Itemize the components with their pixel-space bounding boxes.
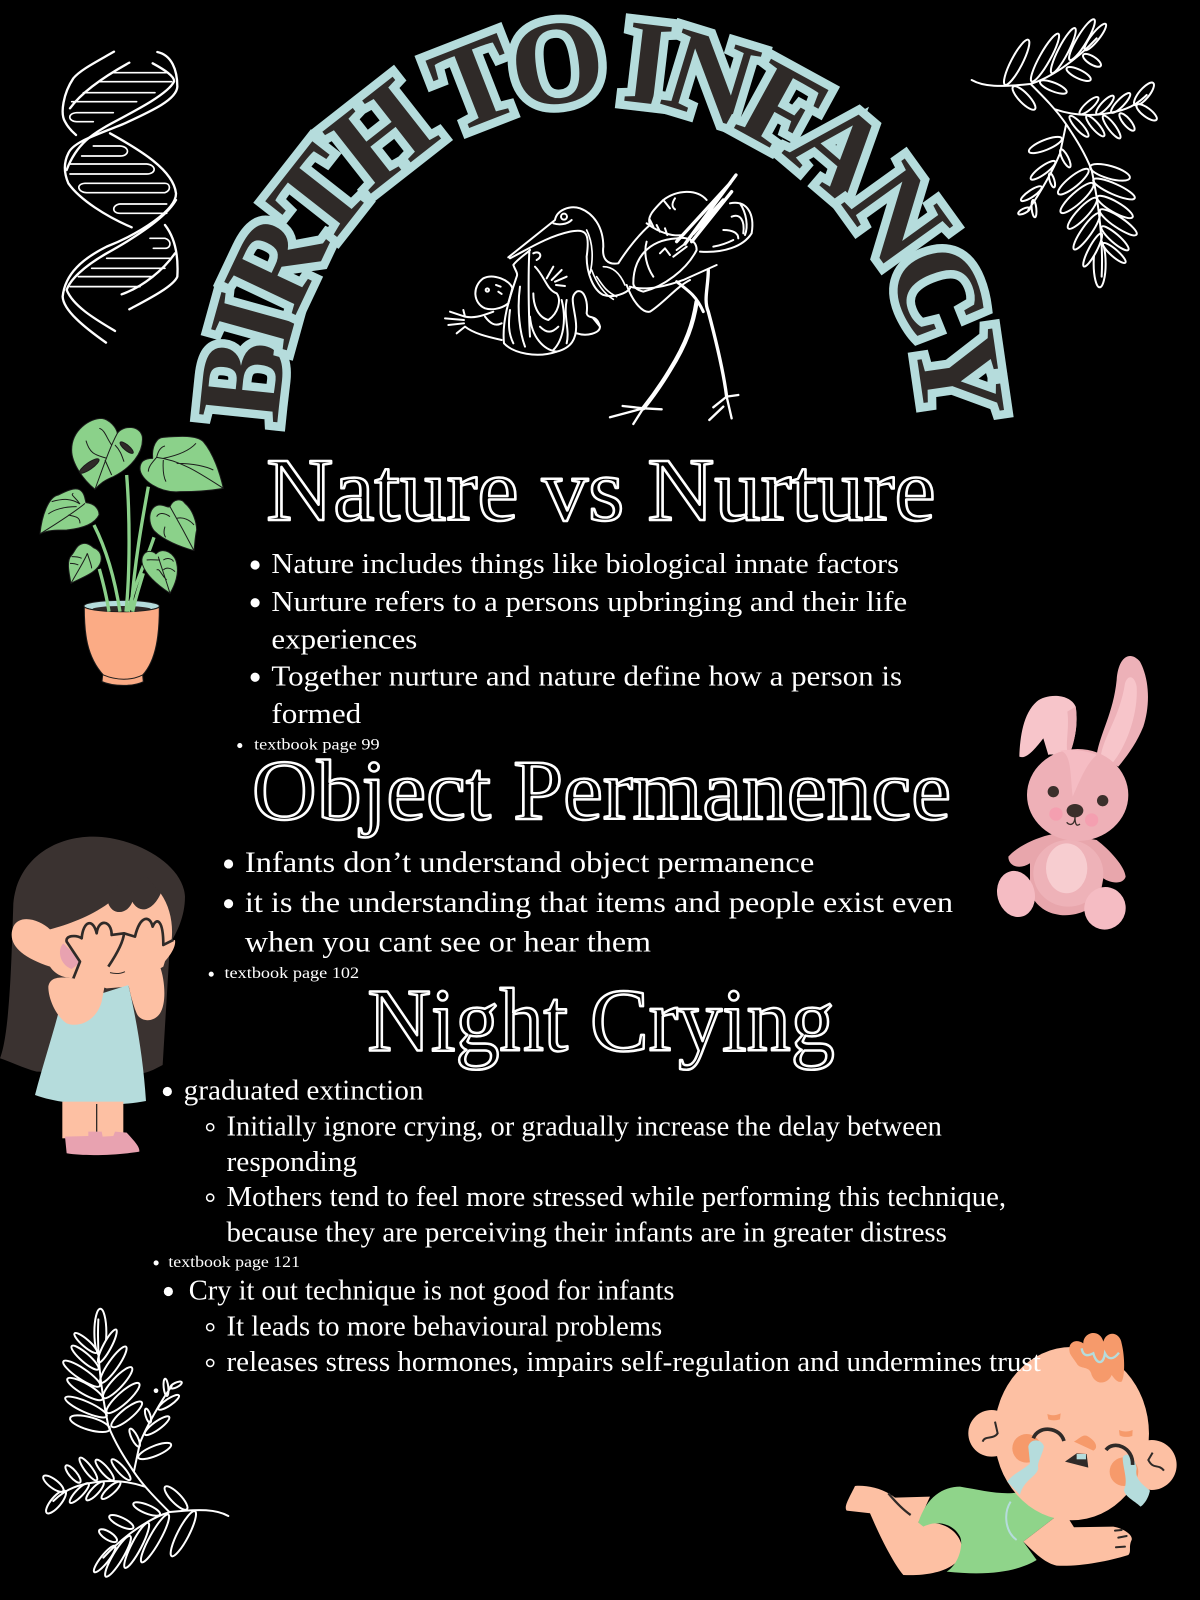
bullet list: object permanence: it is the understanding that items and people exist even [245, 887, 953, 919]
bullet list: cry it out [164, 1276, 1041, 1378]
icon: leafy branch bottom left [41, 1309, 228, 1579]
icon: pink toy bunny [992, 656, 1148, 934]
stork head and neck [508, 192, 707, 264]
bullet list: object permanence: Infants don’t understand object permanence [245, 847, 814, 879]
bullet list: object permanence: when you cant see or hear them [245, 927, 651, 959]
citation: textbook page 121: textbook page 121 [168, 1254, 300, 1271]
heading: night crying: Night Crying [367, 972, 835, 1071]
icon: potted monstera plant [40, 418, 223, 685]
bullet list: nature vs nurture: Nurture refers to a persons upbringing and their life [271, 587, 907, 618]
citation: textbook page 102: textbook page 102 [224, 965, 359, 982]
plant pot [84, 600, 159, 685]
panel: night crying [154, 972, 1041, 1378]
plant stems [94, 475, 154, 612]
bullet list: graduated extinction [163, 1076, 1006, 1249]
bullet list: nature vs nurture: formed [271, 699, 361, 730]
bullet list: nature vs nurture: Nature includes things like biological innate factors [271, 549, 899, 580]
bullet list: object permanence [224, 847, 953, 959]
citation: textbook page 99: textbook page 99 [254, 737, 380, 754]
bullet list: nature vs nurture: experiences [271, 625, 417, 656]
icon: DNA helix [63, 52, 178, 343]
icon: stork carrying baby [445, 175, 752, 424]
bullet list: graduated extinction: Initially ignore crying, or gradually increase the delay between [227, 1111, 942, 1142]
text content [154, 441, 1041, 1378]
bullet list: cry it out: releases stress hormones, impairs self-regulation and undermines trust [227, 1347, 1041, 1378]
heading: object permanence: Object Permanence [252, 743, 951, 838]
title: BIRTH TO INFANCY [190, 13, 1014, 432]
plant leaves [40, 418, 223, 593]
bullet list: graduated extinction: responding [227, 1147, 357, 1178]
bullet list: graduated extinction: Mothers tend to feel more stressed while performing this technique, [227, 1182, 1006, 1213]
icon: crying baby lying down [846, 1333, 1177, 1575]
heading: nature vs nurture: Nature vs Nurture [266, 441, 936, 540]
stork legs [643, 302, 697, 408]
baby cheeks [1012, 1413, 1138, 1486]
bullet list: cry it out: Cry it out technique is not good for infants [189, 1276, 674, 1307]
panel: object permanence [209, 743, 953, 982]
bullet list: graduated extinction: because they are perceiving their infants are in greater distress [227, 1218, 947, 1249]
icon: leafy branch top right [972, 17, 1159, 287]
bullet list: cry it out: It leads to more behavioural problems [227, 1311, 662, 1342]
baby in sling [504, 250, 600, 355]
baby tears [1007, 1440, 1150, 1507]
bullet list: graduated extinction: graduated extinction [184, 1076, 423, 1107]
bullet list: nature vs nurture [251, 549, 907, 730]
panel: nature vs nurture [237, 441, 936, 754]
stork wing [633, 238, 697, 292]
baby hair [1069, 1333, 1124, 1383]
bullet list: nature vs nurture: Together nurture and nature define how a person is [271, 661, 902, 692]
icon: girl covering her eyes [0, 837, 185, 1155]
baby ears [968, 1410, 1177, 1490]
